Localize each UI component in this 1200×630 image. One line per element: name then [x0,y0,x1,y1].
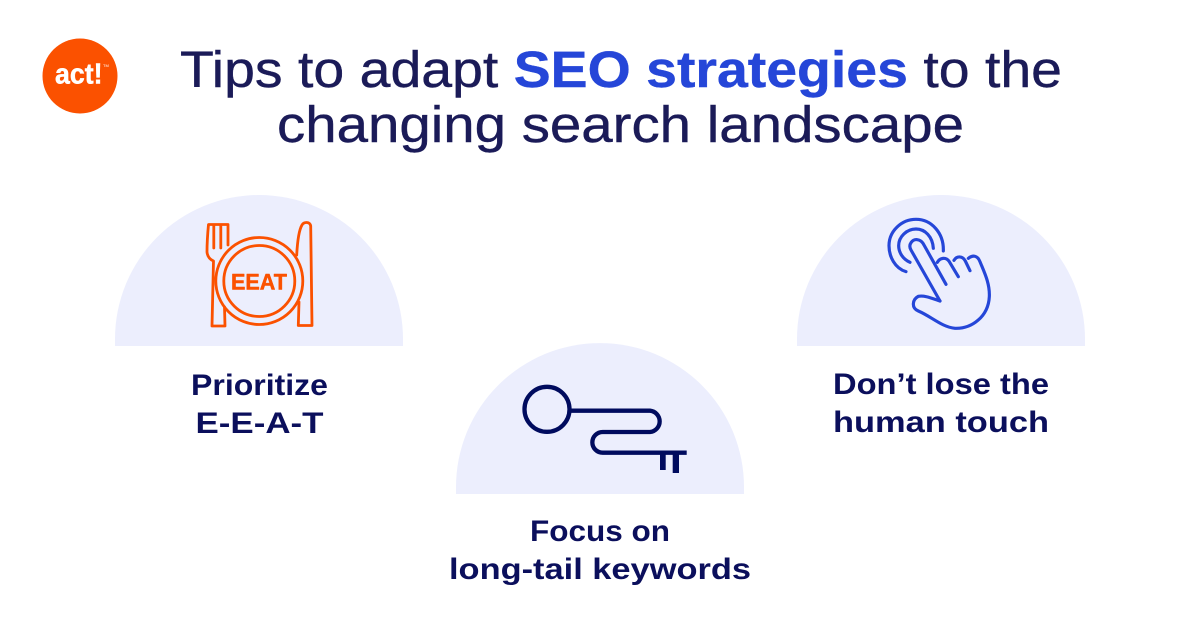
label: Don’t lose the [833,368,1049,401]
label: E-E-A-T [196,407,324,440]
title [180,41,1062,153]
logo: act!: act! [55,58,102,90]
panel: long-tail keywords [449,343,751,586]
icon: long key [524,387,687,473]
title: changing search landscape [277,96,964,153]
semicircle background right [797,195,1085,346]
title: Tips to adapt SEO strategies to the [180,41,1062,98]
label: human touch [833,406,1049,439]
label: Prioritize [191,369,328,402]
icon: plate with fork and knife: EEAT [231,270,288,294]
panel: prioritize E-E-A-T [115,195,403,440]
label: long-tail keywords [449,553,751,586]
logo: act! [42,38,118,114]
icon: tapping hand [889,219,989,328]
semicircle background left [115,195,403,346]
logo: act!: TM [103,63,109,68]
icon: plate with fork and knife [207,222,312,326]
semicircle background middle [456,343,744,494]
label: Focus on [530,515,670,548]
panel: human touch [797,195,1085,439]
